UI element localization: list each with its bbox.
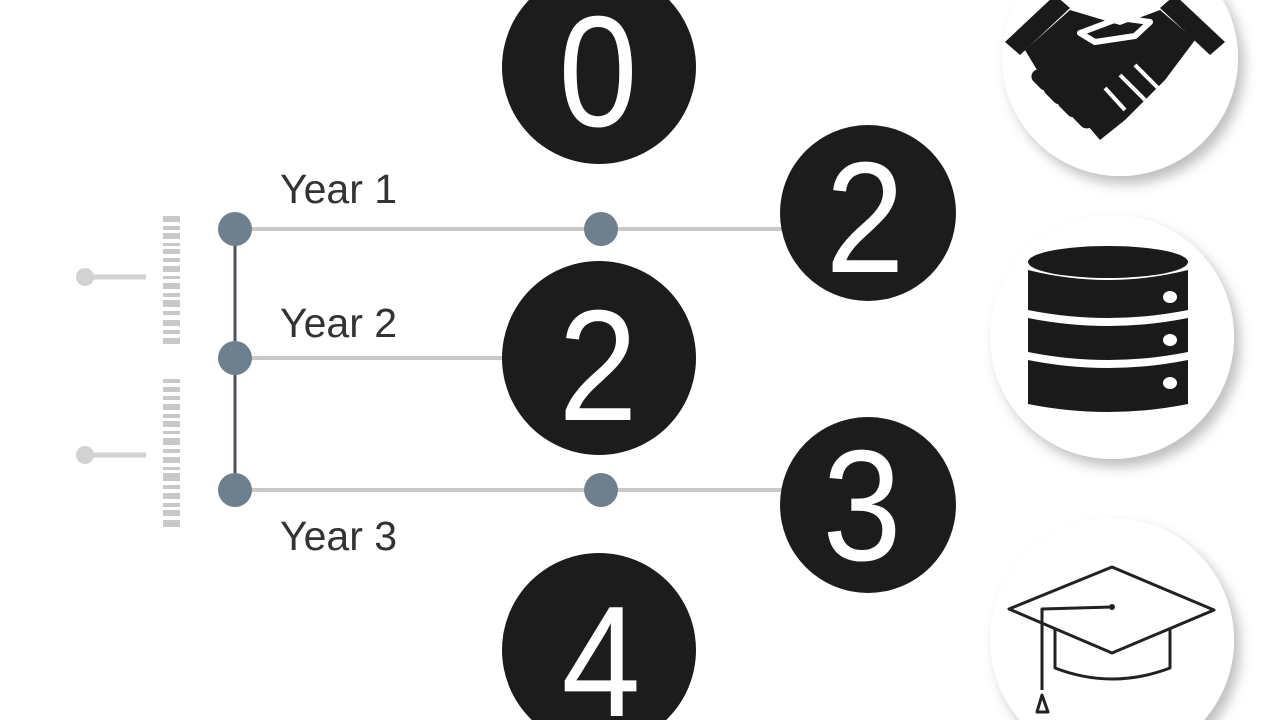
- label: Year 2: Year 2: [280, 300, 397, 346]
- label: Year 1: Year 1: [280, 166, 397, 212]
- number circle 4: [502, 553, 696, 720]
- number circle 2 (center): 2: [558, 277, 638, 454]
- number circle 0: [502, 0, 696, 164]
- icon: graduation cap: [990, 518, 1234, 720]
- number circle 2 (center): [502, 261, 696, 455]
- number circle 2 (right): [780, 125, 956, 306]
- icon: database: [990, 215, 1234, 459]
- number circle 2 (right): 2: [825, 129, 905, 306]
- number circle 3: [780, 417, 956, 594]
- left decoration: small gray pins: [76, 268, 146, 464]
- left decoration: barcode strips: [163, 216, 180, 527]
- label: Year 3: Year 3: [280, 513, 397, 559]
- timeline connectors: [218, 212, 785, 507]
- icon: handshake: [1002, 0, 1238, 176]
- number circle 3: 3: [822, 417, 902, 594]
